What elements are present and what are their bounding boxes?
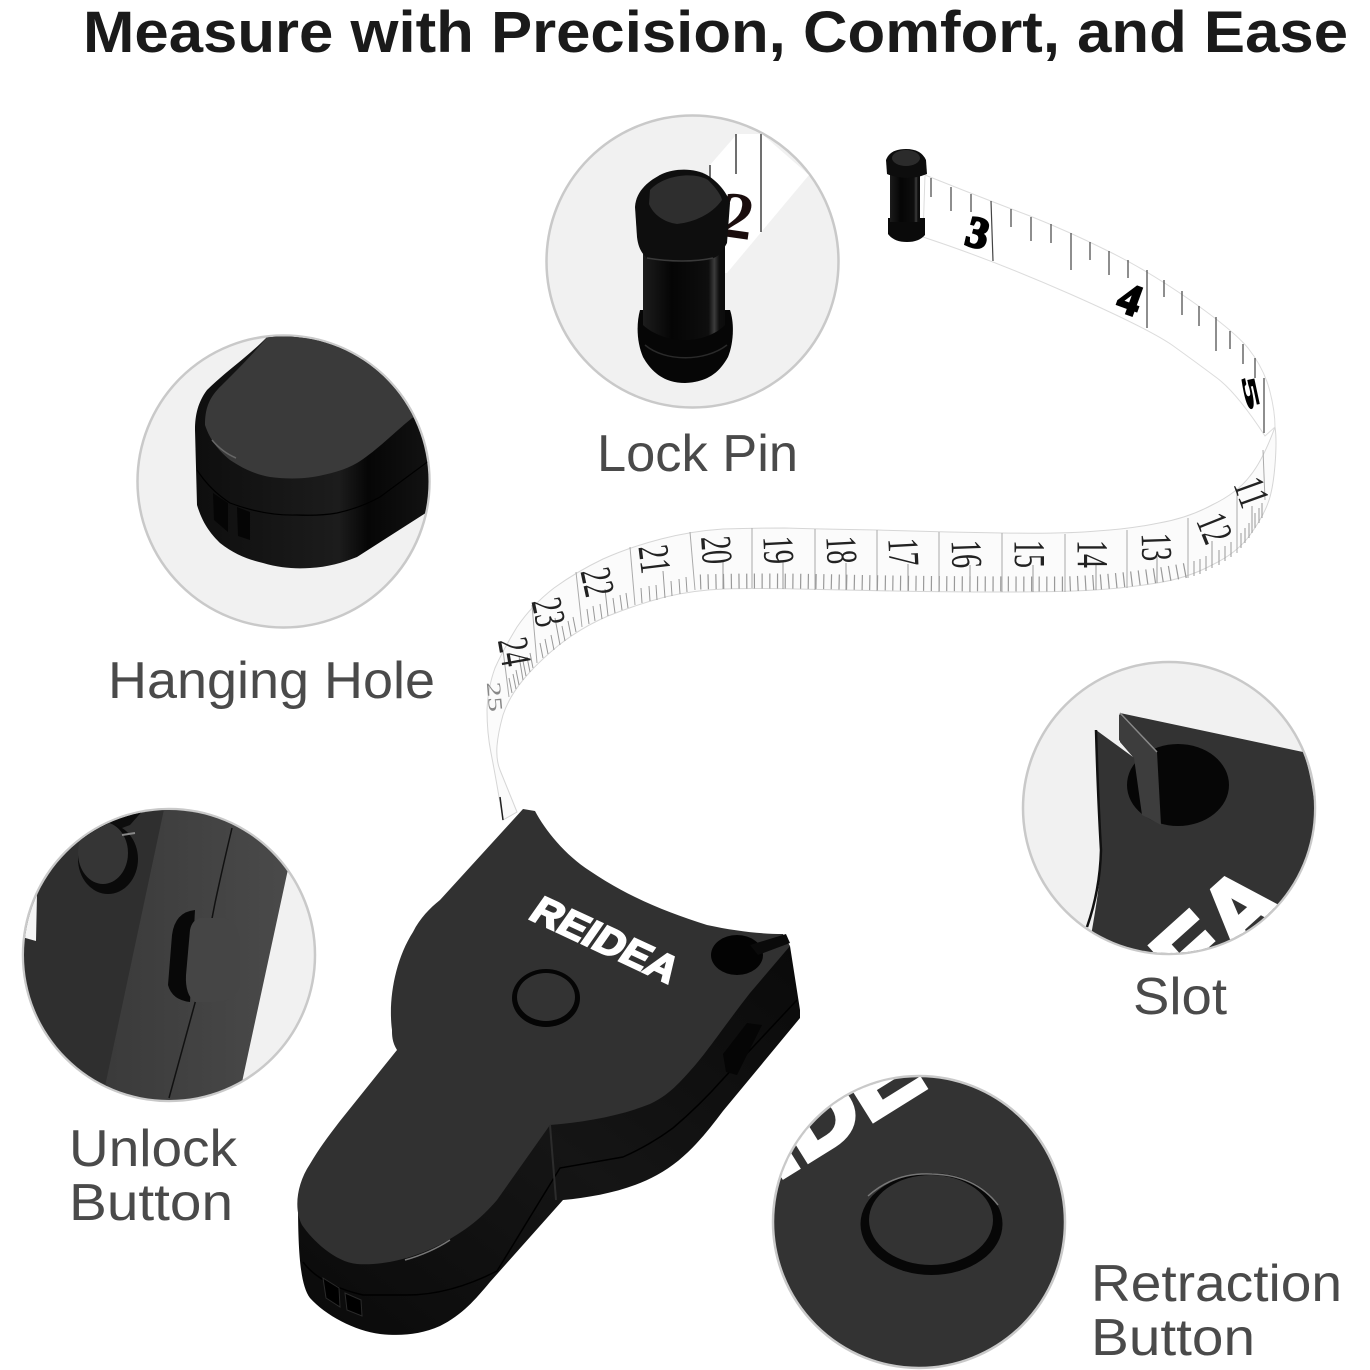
panel: slot	[1022, 660, 1316, 956]
label: unlock button: Button	[69, 1174, 233, 1232]
tape numbers: lower section: 22	[571, 563, 624, 601]
tape ticks: long centre lines	[723, 556, 1157, 592]
slot wall	[1119, 714, 1161, 825]
device face	[297, 809, 790, 1264]
tape numbers: lower section: 20	[691, 534, 742, 566]
brand letters: IDE	[736, 1018, 939, 1197]
slot hole	[711, 935, 763, 975]
retraction button edge	[78, 824, 138, 894]
label: slot: Slot	[1133, 968, 1228, 1026]
tape close-up	[700, 134, 809, 273]
tape numbers: upper section	[961, 206, 1264, 411]
label: retraction button: Retraction	[1091, 1255, 1342, 1313]
retraction button close-up	[860, 1173, 1002, 1275]
tape numbers: upper section: 5	[1237, 375, 1264, 411]
tape tail mark	[500, 797, 503, 820]
tape: lower section	[487, 427, 1276, 820]
logo: REIDEA	[522, 889, 689, 991]
tape lock pin	[886, 149, 927, 242]
tape numbers: lower section	[482, 471, 1279, 713]
panel: hanging hole	[138, 330, 440, 628]
tape numbers: lower section: 17	[878, 537, 929, 567]
icon: device end close-up	[195, 330, 440, 568]
tape numbers: upper section: 3	[961, 206, 995, 260]
retraction button	[512, 969, 580, 1027]
tape numbers: lower section: 23	[522, 593, 575, 631]
icon: lock pin close-up	[635, 170, 733, 383]
panel: lock pin	[546, 116, 838, 408]
device face	[24, 810, 168, 1086]
slot hole	[1127, 744, 1229, 826]
panel: lock pin: 2	[716, 178, 759, 255]
panel: unlock button	[15, 800, 315, 1110]
tape numbers: lower section: 18	[816, 535, 867, 565]
label: retraction button: Button	[1091, 1309, 1255, 1367]
title: Measure with Precision, Comfort, and Ease	[83, 0, 1348, 65]
tape numbers: lower section: 14	[1068, 540, 1117, 568]
brand letters: EA	[1133, 847, 1302, 1014]
tape ticks: upper section	[931, 178, 1264, 433]
tape numbers: upper section: 4	[1111, 273, 1149, 326]
tape measure	[482, 149, 1279, 820]
label: unlock button: Unlock	[69, 1120, 238, 1178]
tape numbers: lower section: 15	[1005, 540, 1054, 568]
label: unlock button	[69, 1120, 238, 1232]
device side	[298, 946, 800, 1335]
tape numbers: lower section: 12	[1187, 506, 1242, 550]
tape numbers: lower section: 24	[488, 634, 541, 670]
panel: retraction button	[772, 1074, 1066, 1370]
unlock button close-up	[168, 910, 195, 1002]
tape ticks: minor lines curved sections	[509, 503, 1262, 693]
tape: upper section	[923, 175, 1275, 436]
unlock button	[723, 1023, 762, 1075]
device corner	[1087, 713, 1320, 960]
tape numbers: lower section: 16	[942, 539, 991, 569]
label: retraction button	[1091, 1255, 1342, 1367]
tape numbers: lower section: 13	[1132, 532, 1181, 562]
device: main tape body	[297, 809, 800, 1335]
side seam	[169, 828, 232, 1098]
tape numbers: lower section: 11	[1224, 471, 1279, 514]
face highlight	[405, 1240, 450, 1260]
tape numbers: lower section: 19	[753, 535, 804, 565]
tape numbers: lower section: 21	[628, 542, 681, 576]
label: hanging hole: Hanging Hole	[108, 652, 435, 710]
tape ticks: major lines	[503, 450, 1265, 697]
neck edge highlight	[550, 1125, 556, 1200]
tape ticks: minor lines flat section	[700, 570, 1188, 584]
tape numbers: lower section: 25	[482, 681, 506, 713]
hanging hole slots	[323, 1278, 362, 1316]
label: lock pin: Lock Pin	[597, 425, 798, 483]
device seam	[303, 1000, 797, 1295]
